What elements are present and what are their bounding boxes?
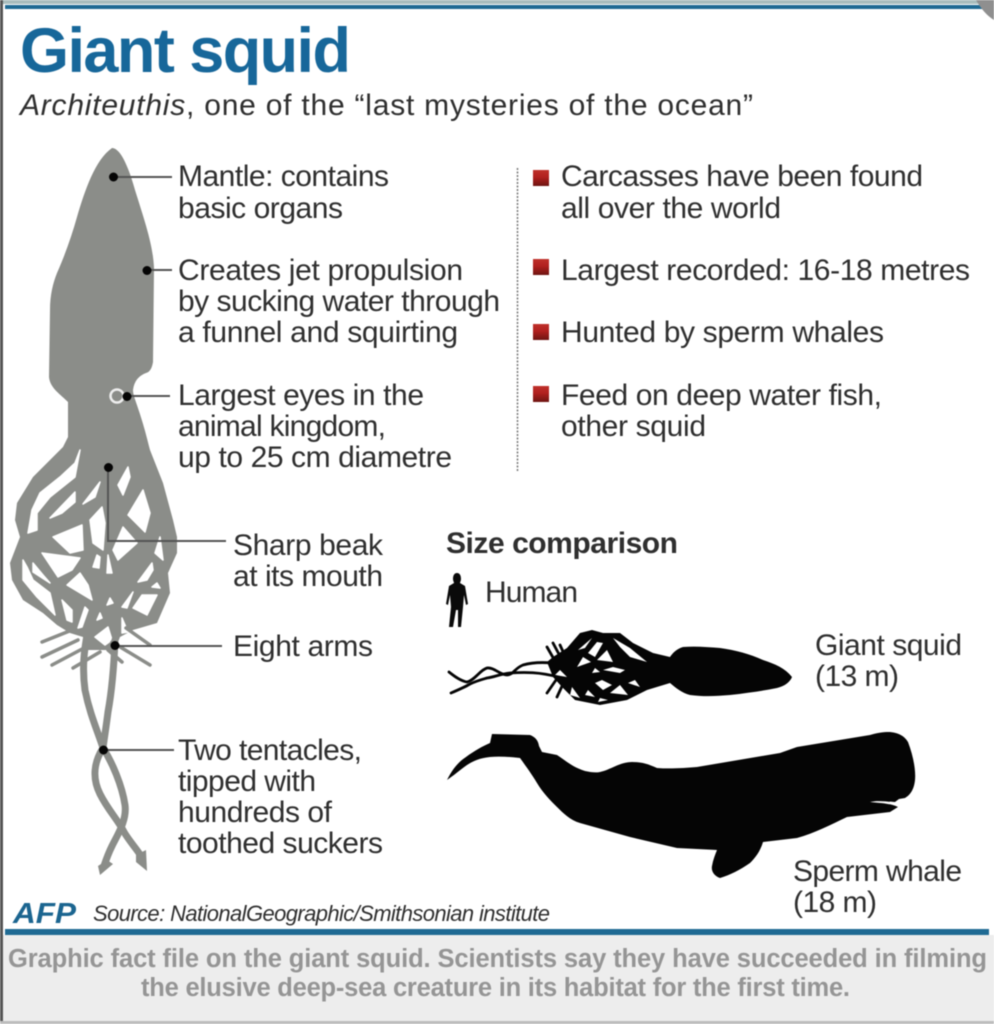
bullet <box>533 259 549 275</box>
title: Giant squid <box>20 16 351 86</box>
bullet <box>533 324 549 340</box>
icon: human silhouette <box>446 573 468 627</box>
label: human: Human <box>485 576 578 609</box>
squid silhouette <box>10 148 177 875</box>
label: tentacles: tipped with <box>178 765 316 798</box>
label: giant squid: (13 m) <box>815 660 899 693</box>
icon: sperm whale silhouette <box>447 732 915 878</box>
fact: hunted: Hunted by sperm whales <box>561 316 884 349</box>
facts list <box>533 160 970 443</box>
label: mantle <box>178 160 389 225</box>
bullet <box>533 386 549 402</box>
label: beak: Sharp beak <box>233 529 384 562</box>
label: sperm whale: (18 m) <box>793 886 877 919</box>
label: eyes <box>178 379 452 474</box>
label: jet propulsion <box>178 254 500 349</box>
icon: giant squid silhouette <box>449 630 792 705</box>
label: jet propulsion: Creates jet propulsion <box>178 254 463 287</box>
anatomy leader lines <box>103 177 226 750</box>
label: mantle: basic organs <box>178 192 343 225</box>
fact: feed <box>561 379 882 443</box>
label: tentacles: hundreds of <box>178 796 333 829</box>
size comparison panel <box>446 527 962 919</box>
caption text: Graphic fact file on the giant squid. Scientists say they have succeeded in filming <box>8 945 987 973</box>
caption text: the elusive deep-sea creature in its habitat for the first time. <box>141 974 850 1002</box>
footer rule <box>5 929 989 935</box>
source credit: Source: NationalGeographic/Smithsonian institute <box>93 901 550 926</box>
label: sperm whale: Sperm whale <box>793 855 962 888</box>
fact: carcasses <box>561 160 923 225</box>
label: tentacles: Two tentacles, <box>178 734 362 767</box>
fact: feed: Feed on deep water fish, <box>561 379 882 412</box>
caption text <box>8 945 987 1002</box>
label: giant squid: Giant squid <box>815 629 962 662</box>
bullet <box>533 170 549 186</box>
subtitle: Architeuthis, one of the “last mysteries of the ocean” <box>18 89 753 122</box>
squid anatomy diagram <box>10 148 226 875</box>
anatomy marker dots <box>99 172 152 754</box>
label: giant squid <box>815 629 962 693</box>
label: mantle: Mantle: contains <box>178 160 389 193</box>
label: beak <box>233 529 384 593</box>
label: eyes: animal kingdom, <box>178 410 386 443</box>
label: sperm whale <box>793 855 962 919</box>
label: tentacles: toothed suckers <box>178 827 383 860</box>
anatomy labels <box>178 160 500 860</box>
label: tentacles <box>178 734 383 860</box>
label: beak: at its mouth <box>233 560 383 593</box>
label: eyes: up to 25 cm diametre <box>178 441 452 474</box>
AFP logo: AFP <box>12 898 77 930</box>
fact: largest: Largest recorded: 16-18 metres <box>561 254 970 287</box>
fact: feed: other squid <box>561 410 706 443</box>
caption panel <box>0 935 994 1024</box>
eye marker <box>110 390 124 402</box>
label: jet propulsion: by sucking water through <box>178 285 500 318</box>
fact: carcasses: all over the world <box>561 192 781 225</box>
label: eyes: Largest eyes in the <box>178 379 424 412</box>
heading: size comparison: Size comparison <box>446 527 678 560</box>
fact: carcasses: Carcasses have been found <box>561 160 923 193</box>
label: jet propulsion: a funnel and squirting <box>178 316 458 349</box>
label: arms: Eight arms <box>233 630 373 663</box>
